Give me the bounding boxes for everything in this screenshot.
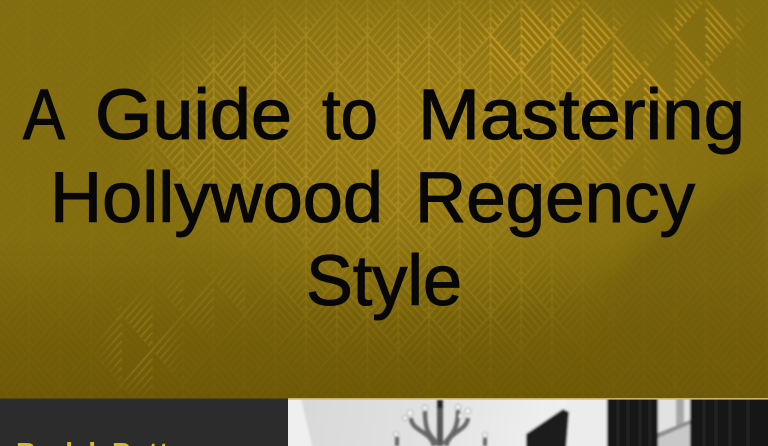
icon: chandelier bbox=[393, 400, 488, 446]
title: Style bbox=[306, 242, 462, 321]
title: Mastering bbox=[418, 76, 745, 155]
section heading bbox=[16, 437, 232, 446]
title: Regency bbox=[415, 159, 695, 238]
title bbox=[23, 76, 745, 321]
panel: dark section bbox=[0, 398, 288, 446]
photo: monochrome room with chandelier bbox=[280, 394, 768, 446]
title: A bbox=[23, 76, 66, 155]
title: Guide bbox=[95, 76, 292, 155]
title: to bbox=[322, 76, 378, 155]
title: Hollywood bbox=[50, 159, 383, 238]
